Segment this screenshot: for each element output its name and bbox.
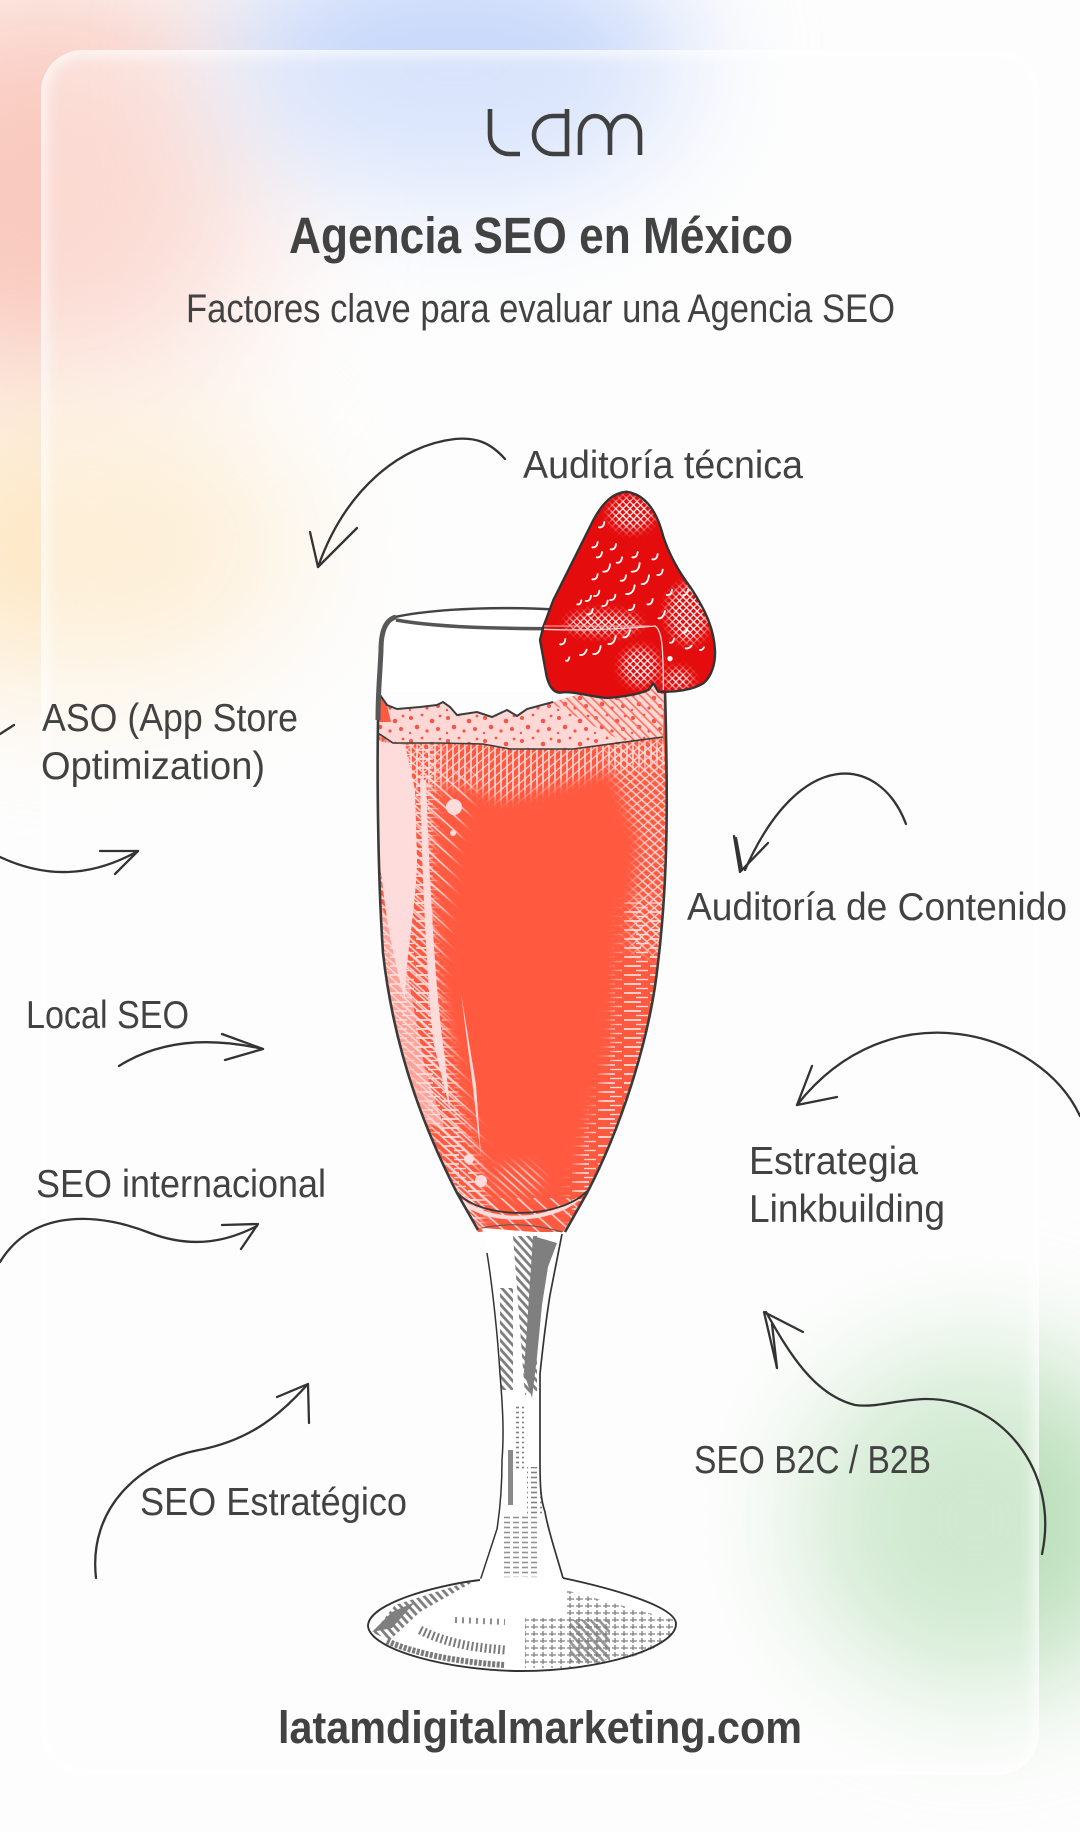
label: Auditoría técnica: Auditoría técnica xyxy=(523,444,803,487)
arrow: SEO B2C / B2B xyxy=(764,1312,1045,1554)
label: ASO xyxy=(41,697,298,788)
label: SEO Estratégico: SEO Estratégico xyxy=(140,1481,407,1524)
label: ASO: ASO (App Store xyxy=(42,697,298,740)
seeds xyxy=(560,522,704,661)
label: Local SEO: Local SEO xyxy=(26,994,189,1037)
arrow: SEO internacional xyxy=(0,1219,258,1262)
label: ASO: Optimization) xyxy=(41,745,265,788)
arrow: Auditoría técnica xyxy=(310,439,505,567)
glass bowl interior xyxy=(378,608,663,692)
label: Estrategia Linkbuilding xyxy=(749,1140,945,1231)
arrow: ASO xyxy=(0,725,138,874)
champagne glass illustration xyxy=(360,487,720,1671)
left highlight band xyxy=(378,742,417,1000)
glass rim and walls xyxy=(378,608,667,1232)
arrow: Local SEO xyxy=(119,1034,263,1066)
label: Estrategia Linkbuilding: Estrategia xyxy=(749,1140,918,1183)
subtitle: Factores clave para evaluar una Agencia SEO xyxy=(186,287,895,331)
label: Auditoría de Contenido: Auditoría de Contenido xyxy=(687,886,1067,929)
footer website: latamdigitalmarketing.com xyxy=(278,1702,802,1753)
arrow: SEO Estratégico xyxy=(95,1384,309,1578)
label: SEO B2C / B2B: SEO B2C / B2B xyxy=(694,1439,931,1482)
bubbles and streak xyxy=(446,799,487,1187)
foam contours xyxy=(378,692,553,717)
label: SEO internacional: SEO internacional xyxy=(36,1163,326,1206)
logo xyxy=(490,109,640,155)
arrow: Auditoría de Contenido xyxy=(734,774,906,872)
strawberry xyxy=(537,487,720,703)
base xyxy=(368,1577,676,1671)
label: Estrategia Linkbuilding: Linkbuilding xyxy=(749,1188,945,1231)
stem xyxy=(480,1225,563,1590)
foam band xyxy=(379,686,664,748)
glass bottom arc xyxy=(462,1199,578,1218)
arrow: Linkbuilding xyxy=(797,1033,1080,1116)
title: Agencia SEO en México xyxy=(289,207,793,264)
liquid xyxy=(379,686,666,1232)
